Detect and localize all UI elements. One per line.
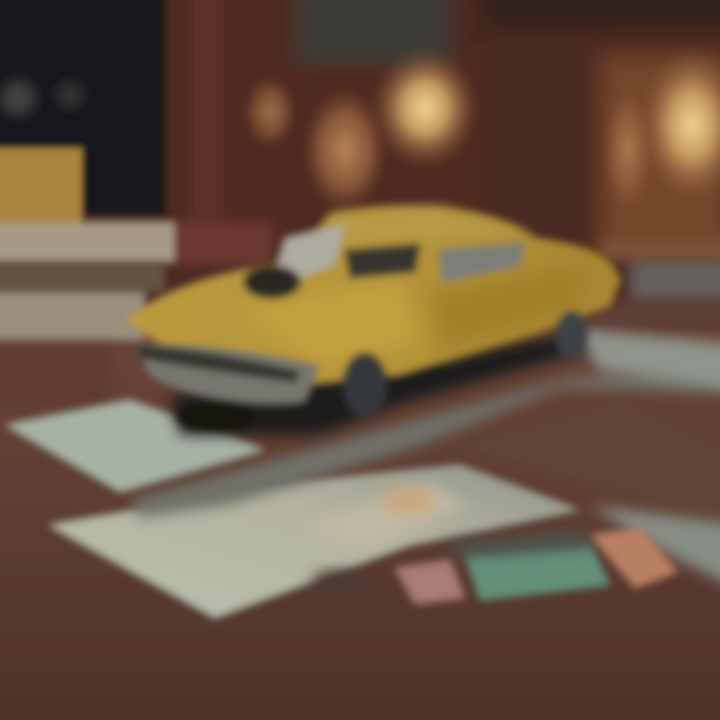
wheels: [343, 353, 387, 417]
windshield: [270, 224, 345, 290]
wall lights: [244, 45, 720, 215]
colored cards: [395, 528, 678, 604]
car: [125, 207, 620, 435]
table surface: [0, 222, 720, 720]
front bumper: [135, 344, 320, 404]
roof: [330, 208, 530, 245]
car shadow: [170, 335, 590, 435]
side windows: [345, 244, 420, 278]
car body: [125, 207, 620, 385]
car hood highlight: [240, 280, 420, 365]
paperwork: [5, 328, 720, 618]
left background objects: [0, 80, 272, 264]
